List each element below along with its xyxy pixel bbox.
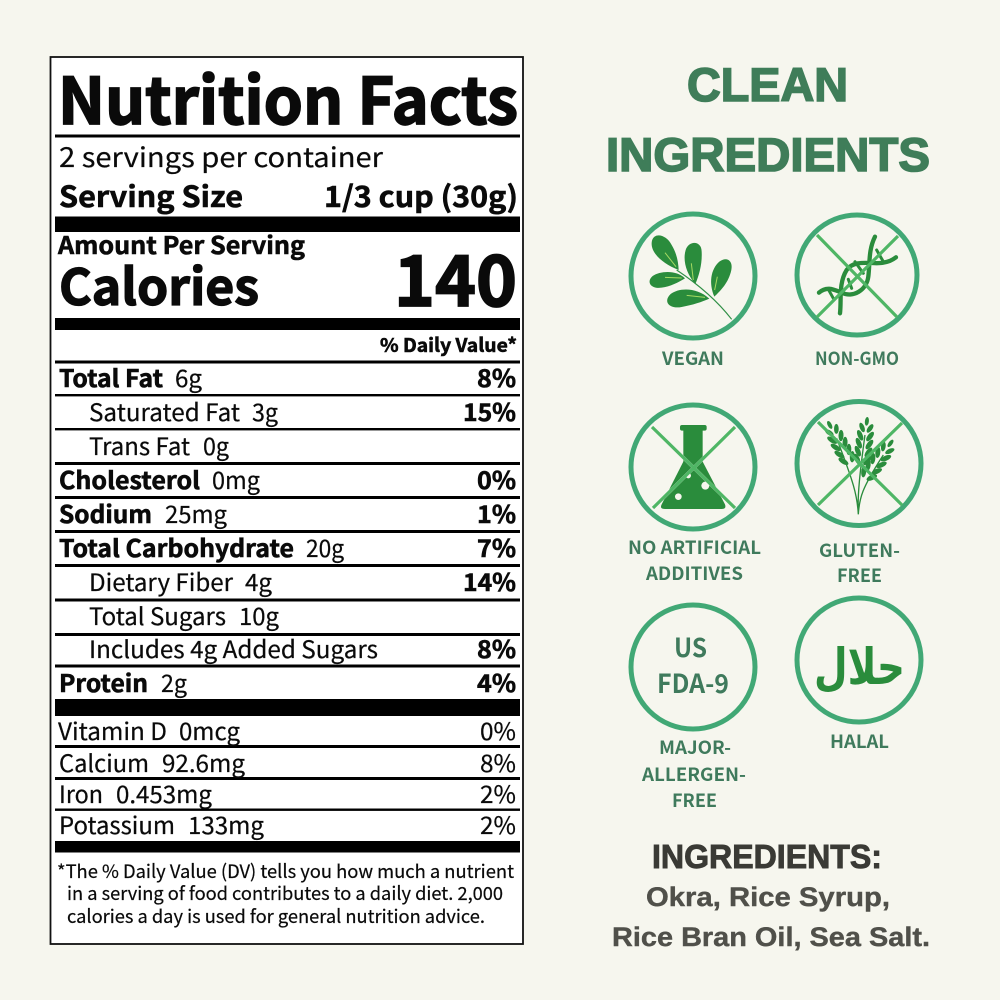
badge: halal	[797, 598, 921, 754]
footnote: *The % Daily Value (DV) tells you how much a nutrient	[57, 858, 514, 884]
cross-out	[817, 235, 898, 317]
nutrient rows: 25mg	[165, 495, 227, 530]
label	[819, 537, 900, 588]
label: VEGAN	[661, 345, 724, 371]
footnote: calories a day is used for general nutrition advice.	[67, 903, 485, 929]
vitamins and minerals rows: Iron	[59, 775, 103, 810]
icon: wheat	[819, 416, 901, 514]
badge: no artificial additives	[628, 405, 761, 586]
nutrient rows: 7%	[477, 529, 516, 564]
label: GLUTEN-	[819, 537, 900, 563]
nutrient rows	[59, 359, 516, 699]
ingredients block	[612, 838, 930, 952]
badge: us fda-9	[631, 605, 755, 813]
vitamins and minerals rows: 92.6mg	[162, 744, 245, 779]
vitamins and minerals rows: 0.453mg	[116, 775, 212, 810]
label	[628, 534, 761, 586]
nutrient rows: Includes 4g Added Sugars	[89, 630, 378, 665]
nutrient rows: 8%	[477, 359, 516, 394]
nutrient rows: 4%	[477, 664, 516, 699]
cross-out	[652, 427, 735, 508]
nutrient rows: Total Sugars	[89, 597, 226, 632]
heading: clean ingredients: INGREDIENTS	[606, 128, 930, 181]
nutrient rows: 4g	[245, 563, 272, 598]
vitamins and minerals rows: 8%	[480, 744, 516, 779]
vitamins and minerals rows: Potassium	[59, 806, 175, 841]
nutrient rows: Trans Fat	[89, 427, 190, 462]
ingredients block: INGREDIENTS:	[652, 838, 882, 875]
label: NON-GMO	[815, 345, 899, 371]
daily value header: % Daily Value*	[380, 331, 517, 358]
nutrient rows: 2g	[161, 664, 187, 699]
nutrient rows: 0mg	[212, 461, 260, 496]
nutrient rows: Total Carbohydrate	[59, 529, 294, 564]
badge: vegan	[631, 214, 755, 371]
heading: Nutrition Facts: Nutrition Facts	[58, 51, 518, 143]
fda text	[657, 628, 729, 701]
vitamins and minerals rows: 0mcg	[179, 712, 240, 747]
nutrient rows: 10g	[239, 597, 279, 632]
calories block: Calories	[59, 248, 259, 320]
nutrient rows: Dietary Fiber	[89, 563, 234, 598]
label: MAJOR-	[659, 734, 731, 760]
label: ALLERGEN-	[641, 761, 746, 787]
cross-out	[818, 422, 902, 505]
vitamins and minerals rows: Vitamin D	[58, 712, 167, 747]
label: FREE	[837, 562, 882, 588]
serving info: 2 servings per container	[59, 136, 384, 175]
nutrient rows: Total Fat	[59, 359, 163, 394]
vitamins and minerals rows: Calcium	[59, 744, 149, 779]
vitamins and minerals rows	[58, 712, 516, 841]
serving info: Serving Size	[59, 174, 243, 216]
calories block: 140	[394, 226, 517, 327]
nutrient rows: Sodium	[59, 495, 152, 530]
nutrient rows: 0g	[203, 427, 229, 462]
calories block	[57, 226, 517, 327]
nutrient rows: 14%	[463, 563, 516, 598]
ingredients block: Rice Bran Oil, Sea Salt.	[612, 922, 930, 952]
footnote	[57, 858, 514, 929]
nutrient rows: 1%	[477, 495, 516, 530]
label: FREE	[672, 787, 717, 813]
footnote: in a serving of food contributes to a daily diet. 2,000	[67, 880, 503, 906]
nutrient rows: Cholesterol	[59, 461, 200, 496]
vitamins and minerals rows: 133mg	[188, 806, 264, 841]
serving info: 1/3 cup (30g)	[324, 174, 518, 216]
fda text: US	[674, 628, 707, 665]
heading: clean ingredients: CLEAN	[687, 58, 848, 111]
label: ADDITIVES	[645, 560, 743, 586]
nutrient rows: 0%	[477, 461, 516, 496]
icon: flask	[661, 425, 725, 509]
fda text: FDA-9	[657, 664, 729, 701]
label: NO ARTIFICIAL	[628, 534, 761, 560]
icon: dna strand	[819, 237, 896, 313]
label: HALAL	[830, 728, 889, 754]
badge: gluten-free	[797, 402, 921, 588]
badge: non-gmo	[797, 215, 917, 371]
vitamins and minerals rows: 2%	[480, 806, 516, 841]
serving info	[59, 136, 518, 216]
nutrient rows: Saturated Fat	[89, 393, 240, 428]
heading: clean ingredients	[606, 58, 930, 181]
vitamins and minerals rows: 2%	[480, 775, 516, 810]
nutrient rows: 20g	[306, 529, 344, 564]
label	[641, 734, 746, 813]
icon: arabic halal word: حلال	[814, 638, 905, 696]
ingredients block: Okra, Rice Syrup,	[646, 882, 890, 912]
nutrient rows: 8%	[477, 630, 516, 665]
icon: leaf sprig	[650, 235, 732, 319]
nutrient rows: 3g	[252, 393, 278, 428]
nutrient rows: 15%	[463, 393, 516, 428]
panel: nutrition facts label	[50, 51, 523, 944]
nutrient rows: Protein	[59, 664, 148, 699]
vitamins and minerals rows: 0%	[480, 712, 516, 747]
calories block: Amount Per Serving	[57, 226, 305, 261]
nutrient rows: 6g	[175, 359, 202, 394]
